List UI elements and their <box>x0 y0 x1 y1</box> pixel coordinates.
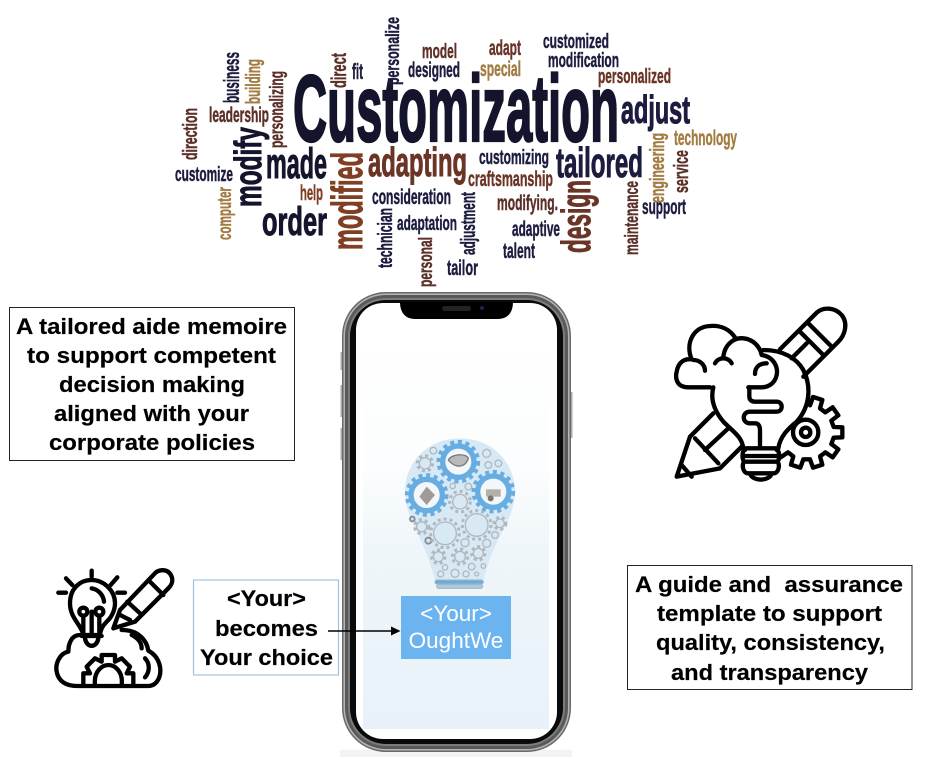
bulb base <box>435 580 483 584</box>
word cloud: personalizing <box>267 71 288 148</box>
word cloud: adjust <box>621 89 690 132</box>
text box: aide memoire: to support competent <box>27 343 277 368</box>
blue gears <box>407 442 513 515</box>
word cloud: customized <box>543 31 609 53</box>
word cloud: direction <box>180 108 202 160</box>
blue label: Your OughtWe: <Your> <box>420 601 492 626</box>
word cloud: modification <box>548 50 619 72</box>
phone notch <box>400 302 513 319</box>
word cloud: help <box>300 182 323 205</box>
word cloud: order <box>262 200 327 244</box>
word cloud: technology <box>674 127 737 150</box>
word: Customization: Customization <box>293 56 619 162</box>
word cloud: craftsmanship <box>468 168 553 191</box>
text box: guide and assurance: template to support <box>657 601 883 626</box>
screen gradient panel <box>363 330 549 729</box>
word cloud: talent <box>503 240 535 263</box>
text box: your choice: becomes <box>215 616 318 641</box>
word cloud: modify <box>228 127 270 207</box>
phone <box>340 292 572 757</box>
word cloud: design <box>553 180 599 253</box>
word cloud: personal <box>416 237 437 287</box>
blue label: Your OughtWe: OughtWe <box>409 628 503 653</box>
text box: aide memoire: aligned with your <box>54 401 249 426</box>
word cloud: adapt <box>489 37 521 60</box>
word cloud: computer <box>215 187 236 240</box>
word cloud: consideration <box>372 186 451 209</box>
word cloud: adaptation <box>397 213 457 235</box>
text box: guide and assurance: and transparency <box>671 660 869 685</box>
word cloud <box>175 17 737 287</box>
word cloud: customize <box>175 164 233 186</box>
text box: your choice <box>194 580 338 675</box>
word cloud: direct <box>328 53 351 88</box>
arrow to label <box>328 626 400 636</box>
lightbulb of gears <box>405 438 515 588</box>
word cloud: building <box>243 59 265 104</box>
text box: guide and assurance: A guide and assurance <box>635 572 903 597</box>
blue label: Your OughtWe <box>401 596 511 659</box>
word cloud: technician <box>375 208 397 268</box>
word cloud: modifying. <box>497 192 558 215</box>
text box: your choice: <Your> <box>227 586 306 611</box>
text box: aide memoire <box>10 308 294 460</box>
word cloud: fit <box>352 59 363 84</box>
word cloud: modified <box>323 152 372 250</box>
word cloud: model <box>422 41 457 63</box>
word cloud: personalized <box>598 66 671 88</box>
word cloud: designed <box>408 59 460 82</box>
word cloud: tailored <box>556 139 643 186</box>
word cloud: engineering <box>647 133 669 203</box>
text box: guide and assurance <box>628 566 912 690</box>
word cloud: customizing <box>479 147 549 169</box>
text box: aide memoire: corporate policies <box>49 430 255 455</box>
word cloud: tailor <box>447 257 478 280</box>
word cloud: business <box>219 52 244 103</box>
icon: cloud bulb pencil gear <box>676 309 845 480</box>
word cloud: adapting <box>368 139 467 185</box>
word cloud: adjustment <box>458 192 480 255</box>
word cloud: adaptive <box>512 218 560 241</box>
text box: guide and assurance: quality, consistency, <box>656 630 885 655</box>
text box: aide memoire: A tailored aide memoire <box>16 314 287 339</box>
word cloud: support <box>642 196 686 219</box>
word cloud: maintenance <box>622 181 643 255</box>
text box: your choice: Your choice <box>200 645 333 670</box>
word cloud: special <box>480 58 521 81</box>
word cloud: service <box>671 150 693 193</box>
word cloud: leadership <box>209 104 269 127</box>
icon: idea bulb pencil cloud <box>56 570 172 686</box>
text box: aide memoire: decision making <box>59 372 245 397</box>
word cloud: made <box>266 140 327 188</box>
